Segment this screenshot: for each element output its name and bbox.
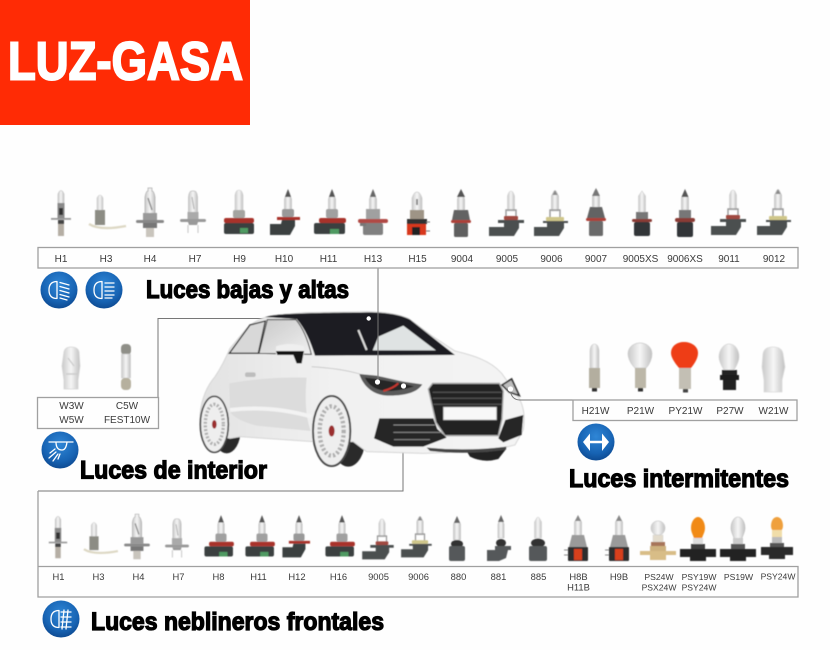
icon: interior light — [42, 432, 78, 468]
heading: Luces intermitentes — [569, 465, 789, 493]
bulb labels — [582, 406, 789, 417]
bulb labels: PS24W — [644, 572, 674, 582]
bulb labels: H9B — [610, 571, 628, 582]
bulb row: luces bajas y altas — [51, 188, 791, 237]
car body — [200, 312, 524, 453]
icon: turn signal — [578, 424, 614, 460]
bulb labels: PSY19W — [682, 572, 717, 582]
bulb: C5W FEST10W — [121, 344, 131, 390]
bulb labels: H1 — [53, 571, 64, 582]
bulb labels: PS19W — [724, 572, 754, 582]
bulb labels: PSX24W — [642, 582, 677, 592]
bulb labels — [59, 401, 151, 426]
bulb labels: 9007 — [585, 254, 608, 265]
icon: fog light — [42, 600, 80, 638]
bulb labels: H1 — [55, 254, 68, 265]
door handle — [245, 372, 256, 377]
bulb labels: 9005 — [496, 254, 519, 265]
bulb labels: C5W — [116, 401, 139, 412]
bulb labels: W21W — [758, 406, 789, 417]
bulb labels: H9 — [233, 254, 246, 265]
bulb labels: 9012 — [763, 254, 786, 265]
connector lines over car — [366, 268, 573, 400]
bulb labels: PSY24W — [682, 582, 717, 592]
bulb labels: PSY24W — [761, 572, 796, 582]
bulb labels: H7 — [189, 254, 202, 265]
bulb row: luces neblineros frontales — [49, 514, 793, 561]
heading: Luces de interior — [80, 456, 267, 484]
bulb labels: H11 — [250, 571, 267, 582]
bulb labels: 881 — [491, 571, 506, 582]
bulb: W3W W5W — [62, 347, 80, 389]
bulb labels: W5W — [59, 415, 84, 426]
bulb labels: 9006 — [408, 571, 429, 582]
bulb labels: 9006XS — [667, 254, 703, 265]
bulb labels: H4 — [133, 571, 144, 582]
bulb labels: 885 — [531, 571, 546, 582]
grille — [428, 383, 503, 436]
bulb labels: H15 — [408, 254, 427, 265]
roof and windscreen — [265, 312, 455, 356]
bulb labels: H3 — [100, 254, 113, 265]
bulb labels: H8B — [569, 571, 588, 582]
front wheel — [313, 396, 350, 466]
main headlight — [359, 374, 422, 396]
connector lines — [38, 318, 403, 491]
heading: Luces neblineros frontales — [91, 608, 384, 636]
label box — [38, 398, 158, 428]
lower air intakes — [374, 415, 523, 453]
bulb labels: H7 — [173, 571, 184, 582]
bulb labels: FEST10W — [104, 415, 151, 426]
bulb labels: 9005 — [368, 571, 389, 582]
right headlight — [502, 379, 519, 396]
bulb labels: H11B — [567, 582, 590, 592]
bulb labels — [55, 254, 786, 265]
car shadow and tyres — [213, 407, 507, 467]
car illustration — [200, 312, 524, 467]
bonnet crease — [312, 367, 360, 374]
panel: luces neblineros frontales — [38, 491, 798, 638]
bulb labels: PY21W — [669, 406, 703, 417]
bulb labels: H12 — [288, 571, 306, 582]
bulb labels: P21W — [627, 406, 655, 417]
bulb labels: H3 — [93, 571, 104, 582]
panel: luces intermitentes — [569, 342, 797, 493]
bulb labels: H4 — [144, 254, 157, 265]
bulb labels: 880 — [451, 571, 466, 582]
rear wheel — [200, 396, 228, 452]
bulb labels: 9005XS — [623, 254, 659, 265]
bulb labels: H10 — [275, 254, 294, 265]
icon: high beam — [40, 272, 78, 308]
bulb labels: P27W — [716, 406, 744, 417]
panel: luces de interior — [38, 344, 267, 484]
bulb labels: H16 — [330, 571, 347, 582]
bulb labels: W3W — [59, 401, 84, 412]
label box — [38, 491, 798, 597]
side windows — [229, 320, 311, 354]
icon: low beam — [86, 272, 122, 308]
label box — [38, 248, 798, 268]
bulb row: luces intermitentes — [589, 342, 785, 392]
bulb labels: 9006 — [540, 254, 563, 265]
bulb labels: 9011 — [718, 254, 740, 265]
side door panel — [229, 378, 311, 431]
logo: LUZ-GASA — [8, 32, 243, 92]
bulb labels: 9004 — [451, 254, 474, 265]
heading: Luces bajas y altas — [146, 276, 349, 304]
bulb labels: H8 — [213, 571, 224, 582]
label box — [573, 400, 797, 420]
bulb labels: H11 — [320, 254, 338, 265]
bulb labels: H21W — [582, 406, 610, 417]
mirror — [276, 344, 304, 363]
windscreen reflection — [373, 326, 436, 350]
bulb labels — [53, 571, 796, 592]
bulb labels: H13 — [364, 254, 383, 265]
panel: luces bajas y altas — [38, 188, 798, 308]
logo — [0, 0, 250, 125]
